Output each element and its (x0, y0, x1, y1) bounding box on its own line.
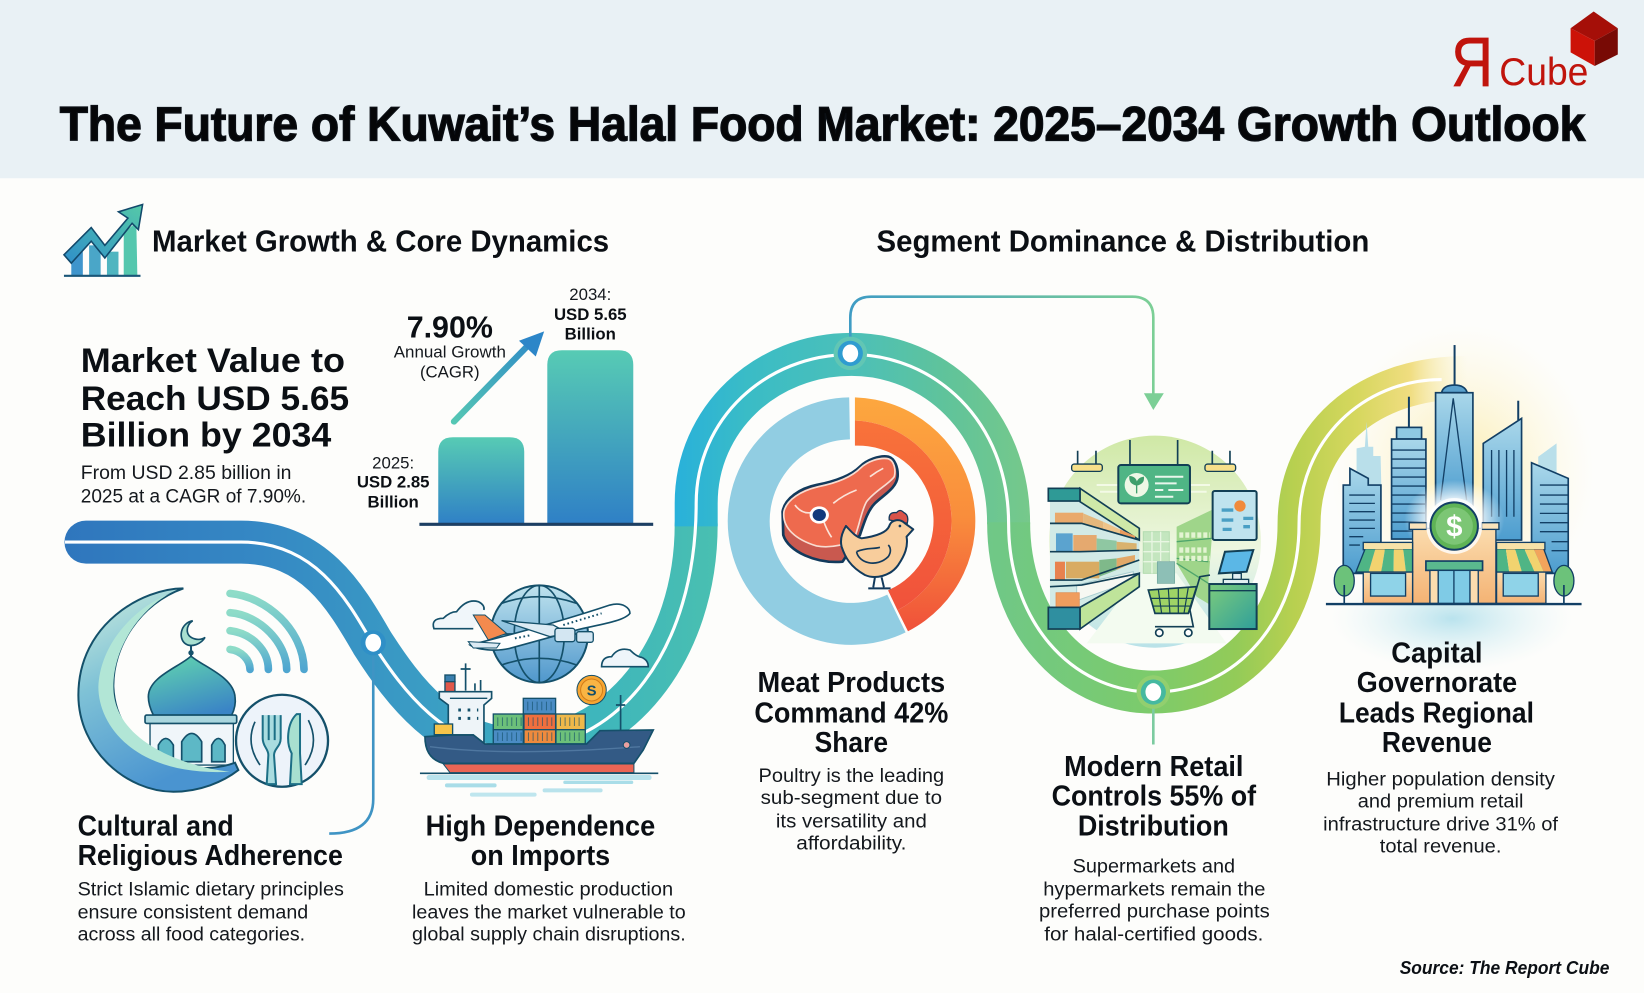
capital governorate text: Capital (1391, 638, 1483, 670)
modern retail text: Distribution (1078, 811, 1229, 843)
imports text: Limited domestic production (424, 878, 673, 900)
meat products text: sub-segment due to (761, 787, 942, 809)
capital governorate text: infrastructure drive 31% of (1323, 813, 1559, 835)
bar chart (357, 285, 653, 524)
node: ribbon bottom (1137, 675, 1170, 709)
cultural text: Strict Islamic dietary principles (78, 878, 344, 900)
logo: RCube: Я (1451, 23, 1493, 101)
cultural text: Cultural and (78, 811, 234, 843)
heading: segment dominance: Segment Dominance & Distribution (877, 225, 1369, 259)
modern retail text: for halal-certified goods. (1044, 924, 1263, 946)
market value block (81, 342, 349, 507)
cultural text (78, 811, 344, 946)
meat products text: Poultry is the leading (759, 765, 944, 787)
flowing ribbon (65, 354, 1468, 749)
market value block: Reach USD 5.65 (81, 380, 349, 418)
cultural text: Religious Adherence (78, 840, 343, 872)
capital governorate text: Governorate (1357, 667, 1517, 699)
bar chart: USD 5.65 (554, 305, 627, 324)
capital governorate text: Leads Regional (1339, 697, 1534, 729)
bar chart: Billion (565, 325, 616, 344)
icon: chicken (841, 510, 913, 588)
capital governorate text: total revenue. (1380, 835, 1501, 857)
market value block: From USD 2.85 billion in (81, 462, 291, 484)
meat products text: Command 42% (754, 697, 948, 729)
connector: top to retail (850, 297, 1164, 410)
market value block: 2025 at a CAGR of 7.90%. (81, 485, 306, 507)
modern retail text: Supermarkets and (1073, 855, 1235, 877)
cultural text: across all food categories. (78, 924, 305, 946)
bar chart: 2034: (569, 285, 611, 304)
logo: RCube (1451, 12, 1618, 101)
icon: city and store: $ (1446, 511, 1462, 544)
modern retail text: Controls 55% of (1052, 780, 1256, 812)
connector: cultural (329, 650, 373, 834)
icon: supermarket (1048, 436, 1261, 648)
CAGR callout: (CAGR) (420, 362, 480, 381)
meat products text: its versatility and (776, 810, 927, 832)
modern retail text (1039, 751, 1270, 946)
imports text: global supply chain disruptions. (412, 924, 686, 946)
capital governorate text: Higher population density (1326, 768, 1555, 790)
modern retail text: Modern Retail (1064, 751, 1243, 783)
CAGR callout: Annual Growth (394, 343, 506, 362)
bar chart: USD 2.85 (357, 473, 430, 492)
donut chart (749, 397, 975, 631)
logo: RCube: Cube (1499, 51, 1588, 94)
icon: globe plane ship (420, 585, 658, 797)
glow under city (1332, 566, 1573, 671)
CAGR callout (394, 311, 506, 381)
meat products text: Share (815, 727, 888, 759)
connector: modern retail (1152, 703, 1155, 744)
modern retail text: preferred purchase points (1039, 901, 1270, 923)
heading: market growth: Market Growth & Core Dynamics (152, 225, 609, 259)
arrow: growth (454, 331, 544, 422)
cultural text: ensure consistent demand (78, 902, 308, 924)
source note: Source: The Report Cube (1400, 957, 1609, 978)
icon: city and store (1326, 345, 1582, 604)
node: ribbon top (834, 337, 867, 370)
title: The Future of Kuwait’s Halal Food Market: 2025–2034 Growth Outlook (60, 98, 1585, 152)
icon: crescent mosque and plate (78, 588, 328, 792)
capital governorate text (1323, 638, 1559, 857)
glow behind city (1332, 325, 1594, 619)
market value block: Billion by 2034 (81, 417, 332, 455)
meat products text: affordability. (796, 832, 906, 854)
icon: growth chart (64, 204, 143, 276)
modern retail text: hypermarkets remain the (1043, 878, 1266, 900)
icon: globe plane ship: S (587, 683, 597, 699)
imports text (412, 811, 686, 946)
imports text: High Dependence (426, 811, 655, 843)
meat products text (754, 667, 948, 854)
market value block: Market Value to (81, 342, 345, 380)
bar chart: 2025: (372, 454, 414, 473)
header band (0, 0, 1644, 178)
capital governorate text: and premium retail (1358, 790, 1523, 812)
icon: meat (783, 456, 898, 562)
imports text: on Imports (471, 840, 610, 872)
imports text: leaves the market vulnerable to (412, 902, 686, 924)
bar chart: Billion (368, 493, 419, 512)
CAGR callout: 7.90% (407, 311, 493, 345)
capital governorate text: Revenue (1382, 727, 1492, 759)
meat products text: Meat Products (758, 667, 945, 699)
node: ribbon left (361, 630, 386, 655)
